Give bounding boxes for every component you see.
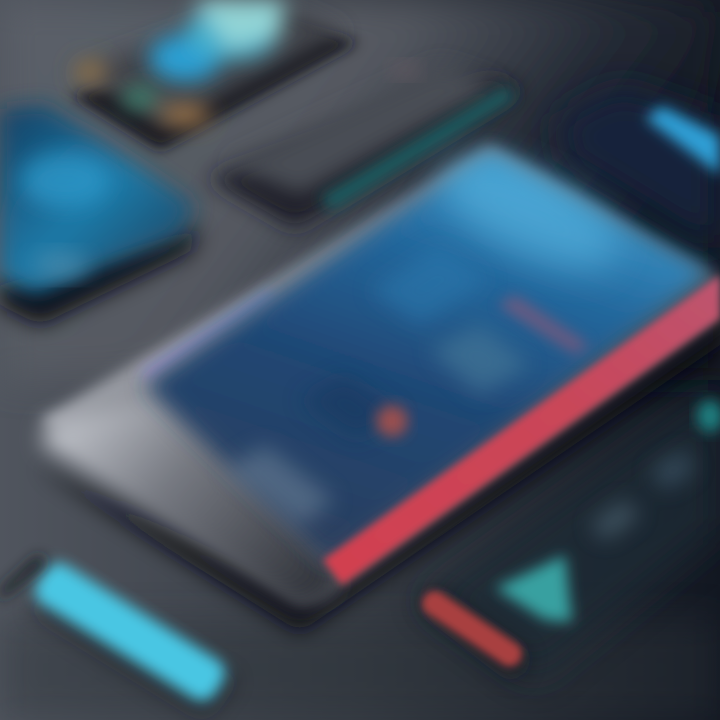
screen faint red line [498, 295, 590, 355]
screen red marker [376, 405, 408, 437]
coloured chips [73, 59, 211, 126]
purple edge highlight [140, 290, 275, 380]
phone screen [145, 150, 712, 565]
screen bright highlight [427, 139, 633, 291]
phone shadow [35, 300, 720, 632]
teal dot [697, 400, 720, 432]
blue bar [645, 106, 720, 175]
cyan pill button [29, 557, 235, 718]
phone body [40, 145, 720, 605]
icon: teal triangle [495, 555, 572, 622]
faint marks [391, 62, 419, 78]
card: left blue panel [0, 105, 200, 325]
red pill button [417, 586, 528, 680]
card: bottom right dark [420, 385, 720, 680]
faint labels [590, 450, 695, 540]
small dark tab, bottom left [0, 555, 48, 600]
card: top left with cloud icon [72, 0, 358, 150]
teal bar [320, 87, 516, 210]
phone lower bezel [42, 400, 340, 608]
red strip [323, 275, 720, 585]
icon: cloud [149, 0, 285, 82]
card: center top with teal bar [208, 62, 522, 228]
phone [40, 139, 720, 608]
screen blocks [225, 245, 530, 525]
card: top right dark with blue bar [555, 85, 720, 255]
